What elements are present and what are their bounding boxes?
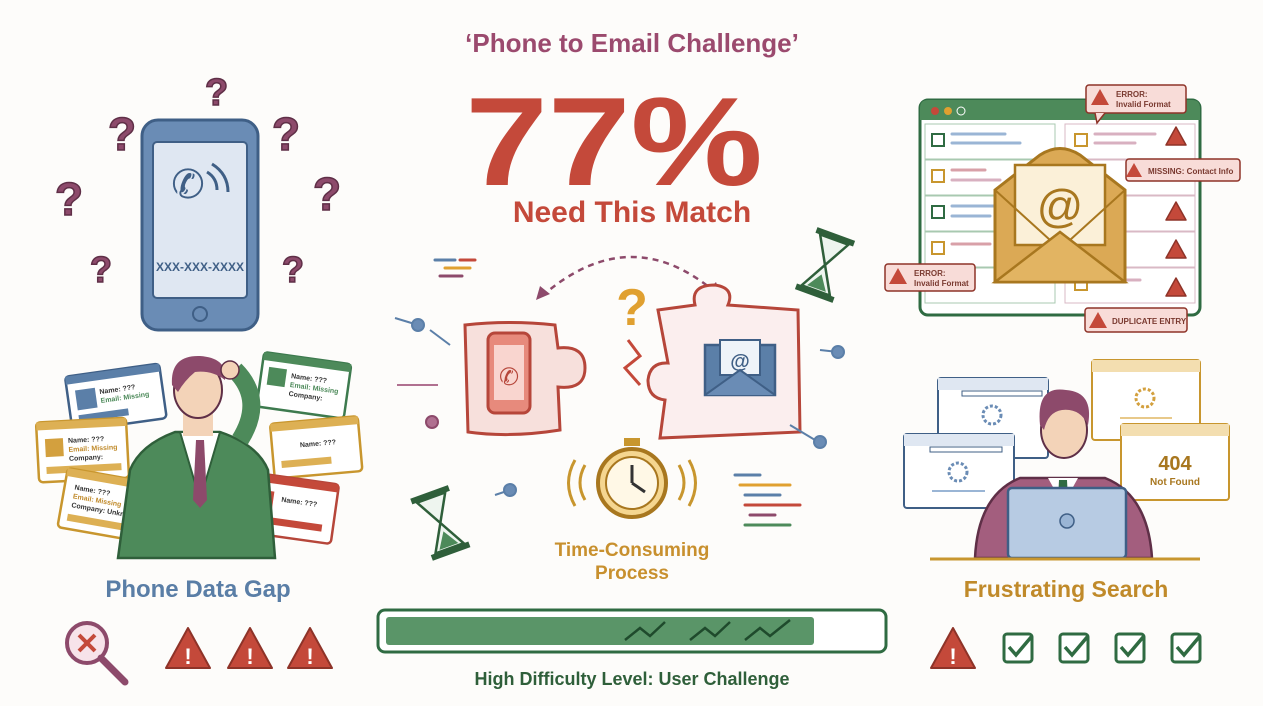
panel: confused man with contact cards: Email: Missing xyxy=(72,493,122,509)
center: break spark xyxy=(625,340,640,385)
panel: confused man with contact cards: Email: Missing xyxy=(100,391,150,405)
panel: confused man with contact cards: Name: ??? xyxy=(68,436,104,445)
code lines decorations xyxy=(435,260,800,525)
panel: error-filled email list window: @ xyxy=(1037,180,1083,232)
panel: confused man with contact cards: Name: ??? xyxy=(281,497,318,509)
panel: phone with question marks xyxy=(55,72,341,330)
panel: phone with question marks: ✆ xyxy=(171,163,205,207)
panel: phone with question marks: XXX-XXX-XXXX xyxy=(156,260,244,274)
panel: confused man with contact cards: Name: ??? xyxy=(291,373,327,385)
icon row: search error and warnings: ! xyxy=(184,644,192,669)
callouts: error tags: ERROR: xyxy=(914,269,946,278)
callouts: error tags: ERROR: xyxy=(1116,90,1148,99)
center: dashed arrow xyxy=(536,257,721,300)
panel: confused man with contact cards: Name: ??? xyxy=(74,484,111,498)
panel: phone with question marks: ? xyxy=(90,249,112,290)
icon row: search error and warnings: ! xyxy=(246,644,254,669)
panel: frustrated man with browser windows xyxy=(904,360,1229,559)
heading: Frustrating Search: Frustrating Search xyxy=(964,576,1168,602)
center: puzzle piece email: @ xyxy=(730,351,750,373)
panel: confused man with contact cards: Company: Unkn xyxy=(71,502,125,518)
progress bar xyxy=(378,610,886,652)
panel: phone with question marks: ? xyxy=(272,108,300,160)
callouts: error tags: Invalid Format xyxy=(1116,100,1171,109)
title: ‘Phone to Email Challenge’ xyxy=(465,28,799,58)
caption: High Difficulty Level: High Difficulty Level: User Challenge xyxy=(474,669,790,689)
panel: confused man with contact cards: Email: Missing xyxy=(289,382,339,396)
callouts: error tags: MISSING: Contact Info xyxy=(1148,167,1233,176)
panel: confused man with contact cards: Company: xyxy=(69,454,103,463)
center: puzzle piece phone: ✆ xyxy=(499,364,519,391)
center: question mark: ? xyxy=(616,279,648,337)
callouts: error tags: Invalid Format xyxy=(914,279,969,288)
callouts: error tags: DUPLICATE ENTRY xyxy=(1112,317,1187,326)
icon: hourglass bottom left xyxy=(410,485,470,561)
panel: error-filled email list window xyxy=(920,100,1200,315)
panel: confused man with contact cards: Name: ??? xyxy=(300,439,336,449)
icon row: warning and checkboxes: ! xyxy=(949,644,957,669)
subtitle: Need This Match: Need This Match xyxy=(513,196,751,229)
panel: phone with question marks: ? xyxy=(282,249,304,290)
text: Process xyxy=(595,563,669,584)
panel: confused man with contact cards: Company: xyxy=(288,391,323,403)
panel: confused man with contact cards: Email: Missing xyxy=(68,444,118,454)
panel: confused man with contact cards: Name: ??? xyxy=(99,384,136,396)
panel: frustrated man with browser windows: Not Found xyxy=(1150,477,1200,488)
big stat 77%: 77% xyxy=(465,72,763,212)
panel: phone with question marks: ? xyxy=(205,72,228,114)
panel: confused man with contact cards xyxy=(36,352,362,558)
center: puzzle piece phone xyxy=(465,322,585,435)
panel: frustrated man with browser windows: 404 xyxy=(1158,453,1193,475)
icon row: warning and checkboxes xyxy=(931,628,1200,669)
panel: phone with question marks: ? xyxy=(313,168,341,220)
icon: stopwatch xyxy=(568,438,696,517)
label: Time-Consuming Process: Time-Consuming xyxy=(555,540,709,561)
decorative network dots xyxy=(395,318,844,496)
center: puzzle piece email xyxy=(648,285,800,438)
panel: phone with question marks: ? xyxy=(55,173,83,225)
heading: Phone Data Gap: Phone Data Gap xyxy=(105,576,291,603)
callouts: error tags xyxy=(885,85,1240,332)
icon row: search error and warnings: ! xyxy=(306,644,314,669)
panel: phone with question marks: ? xyxy=(108,108,136,160)
icon: hourglass top right xyxy=(795,227,855,303)
icon row: search error and warnings xyxy=(67,623,332,682)
